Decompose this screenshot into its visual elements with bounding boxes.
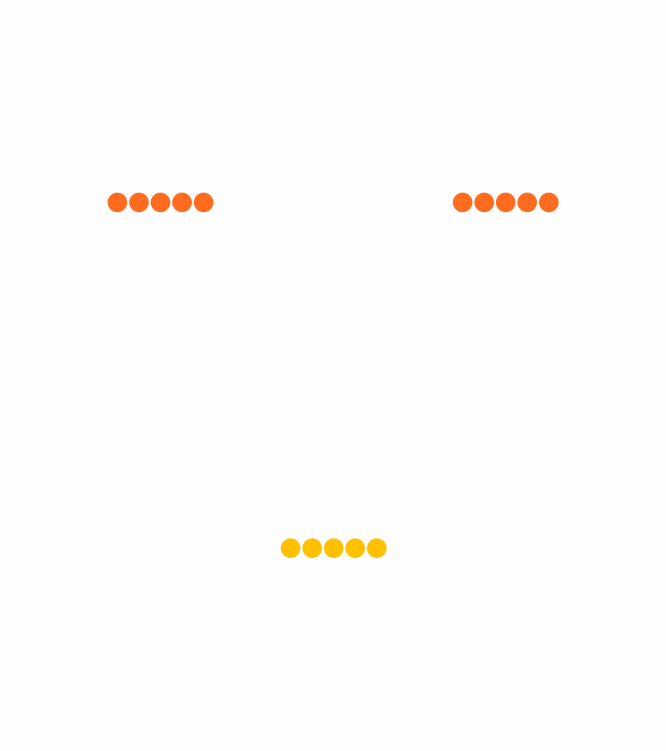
yellow dot row, bottom centre: [281, 538, 387, 558]
orange dot row, right: [453, 193, 559, 212]
orange dot row, left: [108, 193, 213, 212]
